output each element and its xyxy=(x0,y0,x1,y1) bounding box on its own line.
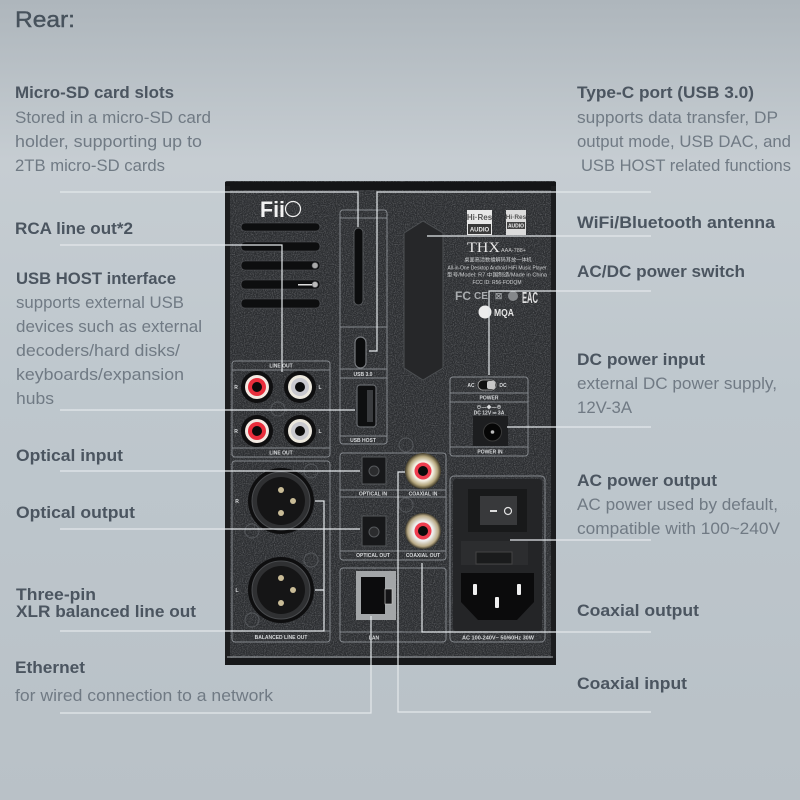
vent slots xyxy=(241,223,320,308)
AC/DC switch xyxy=(467,380,507,390)
panel: RCA line out: L xyxy=(318,385,322,391)
Hi-Res wireless logo: Hi·Res xyxy=(506,214,527,221)
device info text: All-in-One Desktop Android HiFi Music Player xyxy=(448,266,547,272)
text block: USB HOST interface xyxy=(16,269,202,408)
text block: Type-C port: output mode, USB DAC, and xyxy=(577,132,791,151)
text block: Ethernet xyxy=(15,658,274,705)
panel: power: POWER xyxy=(480,396,499,402)
Ethernet port xyxy=(356,571,396,620)
panel: RCA line out: R xyxy=(234,385,238,391)
text block: AC power output: AC power used by default, xyxy=(577,495,778,514)
text block: DC power input xyxy=(577,350,777,417)
text block: coaxial output: Coaxial output xyxy=(577,601,699,620)
text block: Ethernet: for wired connection to a network xyxy=(15,686,274,705)
device info text xyxy=(447,256,547,286)
panel: optical and coaxial: OPTICAL OUT xyxy=(356,553,390,559)
antenna xyxy=(404,221,443,380)
panel: balanced XLR xyxy=(232,461,330,642)
THX logo: THX xyxy=(467,240,500,256)
text block: coaxial input: Coaxial input xyxy=(577,674,687,693)
panel: SD and USB column: USB 3.0 xyxy=(354,372,373,378)
device: rear panel xyxy=(225,181,556,665)
text block: optical input: Optical input xyxy=(16,446,123,465)
panel: RCA line out: L xyxy=(318,429,322,435)
text block: Ethernet: Ethernet xyxy=(15,658,85,677)
C14 socket xyxy=(461,573,534,620)
panel: optical and coaxial: OPTICAL IN xyxy=(359,492,388,498)
text block: USB HOST interface: decoders/hard disks/ xyxy=(16,341,180,360)
panel: AC power xyxy=(450,476,545,642)
title: Rear: xyxy=(15,7,75,32)
text block: optical output: Optical output xyxy=(16,503,135,522)
text block: Type-C port: Type-C port (USB 3.0) xyxy=(577,83,754,102)
certification text and logos xyxy=(447,210,547,319)
text block: AC/DC power switch: AC/DC power switch xyxy=(577,262,745,281)
text block: micro-SD card slots: holder, supporting up to xyxy=(15,132,202,151)
callout line: optical output xyxy=(60,528,360,530)
callout line: optical input xyxy=(60,470,360,472)
callout line: Ethernet xyxy=(60,616,371,713)
panel: LAN xyxy=(340,568,446,642)
panel: power: DC 12V ⎓ 3A xyxy=(474,410,505,416)
panel: balanced XLR: BALANCED LINE OUT xyxy=(255,635,307,641)
text block: USB HOST interface: keyboards/expansion xyxy=(16,365,184,384)
rocker switch xyxy=(468,489,527,532)
AC/DC switch: DC xyxy=(499,383,507,389)
panel: LAN: LAN xyxy=(369,636,380,642)
device body xyxy=(225,181,556,665)
text block: USB HOST interface: supports external USB xyxy=(16,293,184,312)
compliance marks: FC xyxy=(455,289,471,303)
text block: WiFi/Bluetooth antenna: WiFi/Bluetooth antenna xyxy=(577,213,776,232)
callout line: micro-SD xyxy=(60,192,358,227)
RCA jack: bottom red xyxy=(241,415,273,447)
text block: DC power input: 12V-3A xyxy=(577,398,633,417)
optical input port xyxy=(362,457,386,484)
panel: power: ⊖—◆—⊕ xyxy=(476,405,502,411)
text block: XLR balanced line out: Three-pin xyxy=(16,585,96,604)
AC/DC switch: AC xyxy=(467,383,475,389)
Hi-Res wireless logo xyxy=(506,210,527,235)
text block: USB HOST interface: hubs xyxy=(16,389,54,408)
RCA jack: top red xyxy=(241,371,273,403)
callout line: AC/DC switch xyxy=(489,291,651,375)
text block: Type-C port: supports data transfer, DP xyxy=(577,108,778,127)
text block: Type-C port: USB HOST related functions xyxy=(581,156,791,175)
device info text: FCC ID: R56-FODQM xyxy=(472,280,522,286)
callout line: coaxial input xyxy=(398,472,651,712)
text block: Type-C port xyxy=(577,83,791,175)
callout line: antenna xyxy=(427,235,651,237)
panel: balanced XLR: R xyxy=(235,499,239,505)
compliance marks xyxy=(455,289,538,307)
micro-SD slot xyxy=(354,228,363,305)
RCA jack: bottom white xyxy=(284,415,316,447)
XLR connector: R xyxy=(248,468,314,534)
panel: AC power: AC 100-240V~ 50/60Hz 30W xyxy=(462,636,534,642)
panel: SD and USB column xyxy=(340,210,387,444)
callout line: XLR xyxy=(60,501,324,631)
optical output port xyxy=(362,516,386,546)
panel: RCA line out xyxy=(232,361,330,457)
panel: optical and coaxial xyxy=(340,438,446,560)
text block: DC power input: DC power input xyxy=(577,350,705,369)
text block: micro-SD card slots xyxy=(15,83,211,175)
RCA jack: top white xyxy=(284,371,316,403)
callout line: RCA xyxy=(60,245,282,372)
MQA logo: MQA xyxy=(494,308,514,319)
coaxial input jack xyxy=(405,453,441,489)
Type-C port xyxy=(355,337,366,368)
text block: micro-SD card slots: Micro-SD card slots xyxy=(15,83,174,102)
compliance marks: ☒ xyxy=(495,292,502,301)
compliance marks: CE xyxy=(474,291,488,302)
callout line: DC power xyxy=(507,426,651,428)
callout line: USB HOST xyxy=(60,409,355,411)
panel: RCA line out: LINE OUT xyxy=(269,364,293,370)
callout line: AC power xyxy=(510,539,651,541)
Hi-Res logo: Hi·Res xyxy=(467,213,493,222)
text block: XLR balanced line out: XLR balanced line out xyxy=(16,602,196,621)
coaxial output jack xyxy=(405,513,441,549)
text block: AC power output: AC power output xyxy=(577,471,717,490)
text block: DC power input: external DC power supply, xyxy=(577,374,777,393)
panel: optical and coaxial: COAXIAL OUT xyxy=(406,553,440,559)
DC jack xyxy=(473,416,508,446)
text block: AC power output: compatible with 100~240V xyxy=(577,519,781,538)
text block: XLR balanced line out xyxy=(16,585,196,621)
panel: power: POWER IN xyxy=(477,450,503,456)
text block: micro-SD card slots: Stored in a micro-SD card xyxy=(15,108,211,127)
certification text and logos: EAC xyxy=(522,290,538,307)
XLR connector: L xyxy=(248,557,314,623)
panel: RCA line out: R xyxy=(234,429,238,435)
Hi-Res logo xyxy=(467,210,493,235)
text block: USB HOST interface: devices such as external xyxy=(16,317,202,336)
logo: FiiO xyxy=(260,197,300,222)
panel: optical and coaxial: COAXIAL IN xyxy=(409,492,438,498)
callout line: Type-C xyxy=(369,192,651,351)
device info text: 桌面高清数播解码耳放一体机 xyxy=(464,256,533,264)
panel: balanced XLR: L xyxy=(235,588,239,594)
callout line: coaxial output xyxy=(422,563,651,632)
text block: AC power output xyxy=(577,471,781,538)
panel: RCA line out: LINE OUT xyxy=(269,450,293,456)
text block: micro-SD card slots: 2TB micro-SD cards xyxy=(15,156,165,175)
Hi-Res logo: AUDIO xyxy=(470,228,489,234)
USB-A port xyxy=(357,385,376,427)
Hi-Res wireless logo: AUDIO xyxy=(508,224,524,230)
device info text: 型号/Model: R7 中国制造/Made in China xyxy=(447,270,547,278)
logo: FiiO: Fii xyxy=(260,197,285,222)
fuse holder xyxy=(461,541,528,565)
text block: USB HOST interface: USB HOST interface xyxy=(16,269,176,288)
panel: SD and USB column: USB HOST xyxy=(350,438,376,444)
text block: RCA line out: RCA line out*2 xyxy=(15,219,133,238)
panel: power xyxy=(450,377,528,456)
certification text and logos: AAA-788+ xyxy=(501,248,526,254)
